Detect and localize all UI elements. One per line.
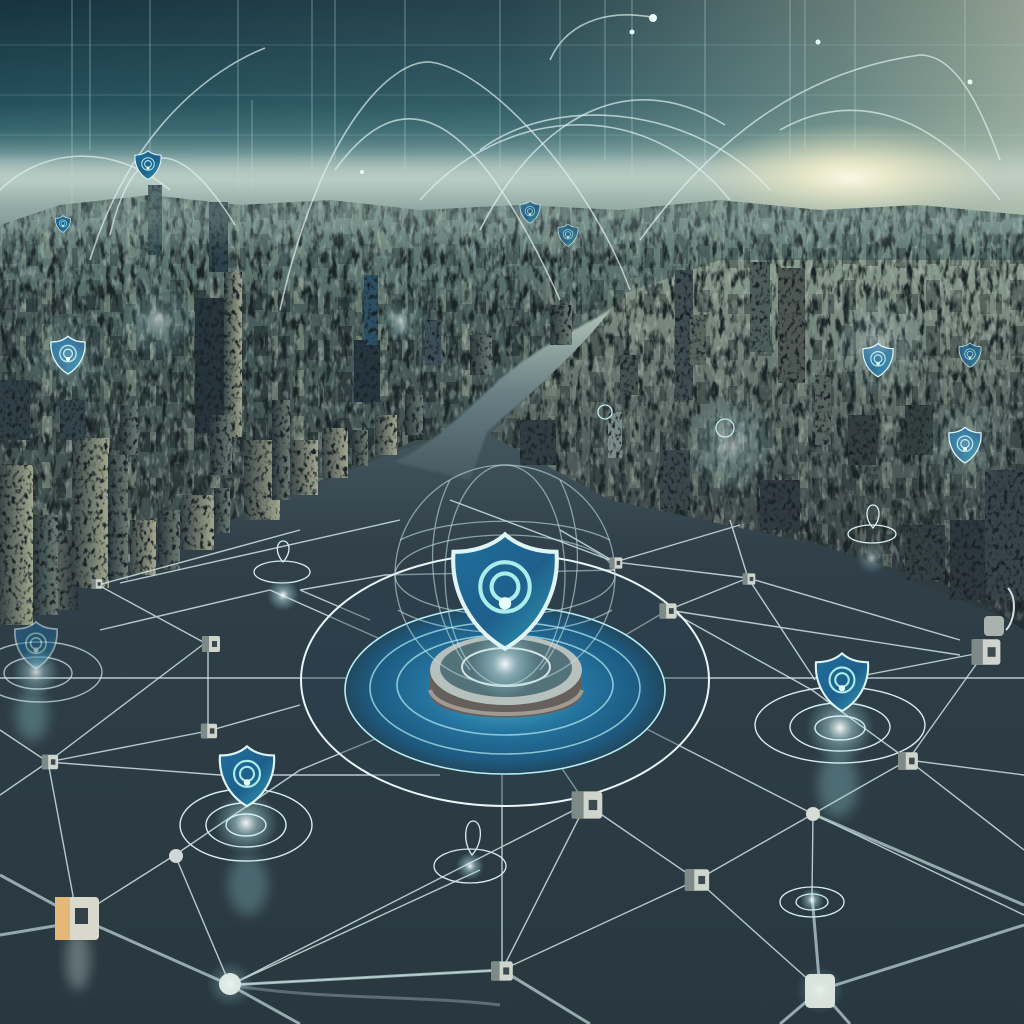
shield: upper center <box>520 201 540 223</box>
node: small box right <box>743 573 755 585</box>
node: bottom left <box>206 960 254 1008</box>
node: edge device <box>984 588 1014 636</box>
node: bottom right <box>796 966 844 1014</box>
distant city shields <box>23 151 1010 495</box>
beacon: lower right <box>780 887 844 917</box>
shield: lower left platform <box>180 746 312 915</box>
node: cube left mid <box>201 724 217 738</box>
node: large cube lower left <box>55 897 99 990</box>
right foreground buildings <box>520 262 1024 600</box>
shield: left city <box>51 336 85 374</box>
small sky nodes <box>360 14 972 174</box>
node: round right <box>806 807 820 821</box>
beacon: lower center <box>434 821 506 883</box>
beacon: top right city <box>598 405 734 437</box>
shield: right city <box>863 344 893 377</box>
node: cube far left <box>42 755 58 769</box>
node: lower right box <box>685 869 709 891</box>
thick foreground lines <box>0 814 1024 1024</box>
left city <box>0 185 600 625</box>
node: far right box <box>898 752 918 770</box>
node: upper right box <box>659 603 677 619</box>
horizon glow band <box>0 123 1024 233</box>
node: left city edge <box>92 579 102 589</box>
outer ring <box>301 554 709 806</box>
beacon: right city <box>848 505 896 574</box>
sky arcs <box>0 15 1000 310</box>
shield: right platform <box>755 653 925 817</box>
beacon: left <box>254 541 310 611</box>
right city <box>490 260 1024 630</box>
sky grid lines <box>0 0 1024 270</box>
node: round lower left <box>169 849 183 863</box>
node: small box center <box>610 557 622 569</box>
node: bottom center <box>491 961 513 981</box>
river <box>395 305 618 480</box>
node: right edge box <box>972 639 1000 665</box>
city glows <box>23 280 1010 495</box>
pedestal <box>430 630 582 718</box>
left foreground buildings <box>0 185 572 625</box>
shield: far left platform <box>0 622 102 741</box>
network nodes <box>42 557 1014 1014</box>
network lines <box>0 500 1024 990</box>
shield: far left small <box>55 216 71 232</box>
location beacons <box>254 405 896 917</box>
shield: right city far <box>959 343 981 367</box>
main platform <box>301 554 709 806</box>
shield: upper center right <box>558 224 578 246</box>
main shield <box>453 534 557 649</box>
node: cube left upper <box>202 636 220 652</box>
shield: right city near <box>949 427 981 463</box>
far city skyline <box>0 195 1024 640</box>
node: center box <box>572 791 602 819</box>
disk rings <box>345 606 665 774</box>
shield: top left <box>135 151 161 180</box>
floor <box>0 420 1024 1024</box>
distant haze over city <box>0 195 1024 235</box>
blue disk <box>345 606 665 774</box>
wireframe globe <box>395 465 615 685</box>
